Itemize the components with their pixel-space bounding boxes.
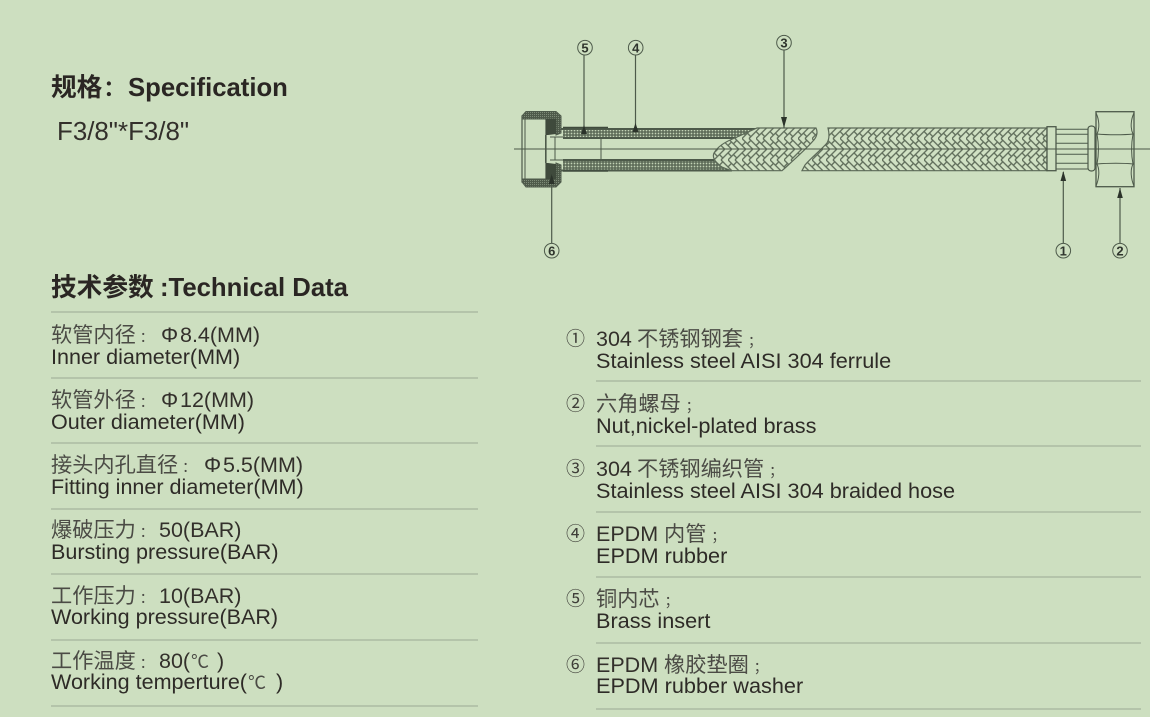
row: working pressure: Working pressure(BAR) [51, 604, 278, 629]
callout 2 [1113, 188, 1127, 258]
inner rubber hose [561, 128, 763, 171]
row: working temperature: 80( [159, 649, 191, 673]
part 2: 六角螺母 ； [596, 392, 700, 416]
row: working temperature: ℃ [248, 673, 266, 693]
row: inner diameter [51, 323, 260, 369]
part 1: ； [748, 333, 762, 350]
row: outer diameter: Outer diameter(MM) [51, 409, 245, 434]
panel: technical data table [51, 312, 478, 706]
row: working temperature: Working temperture( [51, 669, 247, 694]
row: fitting inner diameter: Fitting inner diameter(MM) [51, 474, 304, 499]
panel: parts legend [566, 327, 1141, 709]
row: outer diameter: Φ [161, 388, 178, 412]
row: outer diameter [51, 388, 254, 434]
callout 3 [777, 35, 791, 128]
part 2 [566, 392, 817, 438]
row: fitting inner diameter [51, 453, 304, 499]
center axis [514, 148, 1150, 150]
row: working temperature: ℃ [191, 652, 209, 672]
part 4: ； [711, 528, 725, 545]
part 3: 不锈钢编织管 [637, 457, 764, 481]
ferrule [1047, 127, 1056, 171]
row: working temperature: ) [217, 649, 224, 673]
row: bursting pressure [51, 518, 279, 564]
heading: Technical Data: 技术参数 [51, 274, 154, 302]
row: inner diameter: 软管内径 ： [51, 324, 154, 347]
row: fitting inner diameter: 接头内孔直径 ： [51, 454, 196, 477]
row: outer diameter: 12(MM) [180, 388, 254, 412]
part 1: Stainless steel AISI 304 ferrule [596, 348, 891, 373]
callout 1: 1 [1060, 244, 1067, 258]
part 6: ⑥ [566, 654, 585, 676]
part 4: ④ [566, 523, 585, 545]
row: inner diameter: 8.4(MM) [180, 323, 260, 347]
callout 4 [628, 40, 643, 133]
part 2: ② [566, 393, 585, 415]
callout 5 [578, 40, 592, 135]
part 3 [566, 457, 955, 503]
diagram: braided hose cross-section [514, 35, 1150, 259]
part 2: Nut,nickel-plated brass [596, 413, 817, 438]
braid left section [713, 128, 817, 171]
part 3: ； [769, 463, 783, 480]
row: inner diameter: Φ [161, 323, 178, 347]
callout 6 [544, 174, 559, 258]
collar [1088, 126, 1095, 171]
row: bursting pressure: Bursting pressure(BAR) [51, 539, 279, 564]
row: working pressure: 工作压力 ： [51, 585, 154, 608]
part 3: Stainless steel AISI 304 braided hose [596, 478, 955, 503]
heading: Specification: 规格： [51, 74, 125, 102]
part 6: ； [754, 659, 768, 676]
left nut [522, 112, 601, 187]
part 5: 铜内芯 ； [596, 587, 679, 611]
callout 1 [1056, 171, 1071, 258]
part 6: EPDM rubber washer [596, 673, 803, 698]
row: working pressure [51, 584, 278, 629]
part 5: ⑤ [566, 588, 585, 610]
row: working temperature [51, 649, 283, 694]
braid right section [802, 128, 1047, 171]
callout 5: 5 [581, 40, 589, 56]
part 3: 304 [596, 457, 632, 481]
row: fitting inner diameter: Φ [204, 453, 221, 477]
part 3: ③ [566, 458, 585, 480]
row: working pressure: 10(BAR) [159, 584, 241, 608]
row: bursting pressure: 爆破压力 ： [51, 519, 154, 542]
part 4: 内管 [664, 522, 706, 546]
part 6 [566, 653, 803, 698]
part 5: Brass insert [596, 608, 710, 633]
part 6: 橡胶垫圈 [664, 653, 749, 677]
row: inner diameter: Inner diameter(MM) [51, 344, 240, 369]
part 1: 不锈钢钢套 [637, 327, 743, 351]
part 1: ① [566, 328, 585, 350]
part 4 [566, 522, 727, 568]
part 6: EPDM [596, 653, 658, 677]
part 4: EPDM rubber [596, 543, 727, 568]
row: working temperature: ) [276, 669, 283, 694]
heading: Specification: Specification [128, 74, 288, 102]
heading: Technical Data: :Technical Data [160, 274, 349, 302]
callout 2: 2 [1116, 244, 1124, 258]
callout 6: 6 [548, 244, 555, 258]
row: working temperature: 工作温度 ： [51, 650, 154, 673]
row: outer diameter: 软管外径 ： [51, 389, 154, 412]
row: fitting inner diameter: 5.5(MM) [223, 453, 303, 477]
part 1: 304 [596, 327, 632, 351]
part 1 [566, 327, 891, 373]
threaded neck [1056, 129, 1088, 169]
part 5 [566, 587, 710, 633]
callout 3: 3 [780, 36, 788, 50]
part 4: EPDM [596, 522, 658, 546]
right hex nut [1096, 112, 1134, 187]
row: bursting pressure: 50(BAR) [159, 518, 241, 542]
specification value: F3/8"*F3/8" [57, 118, 189, 146]
callout 4: 4 [632, 40, 640, 56]
